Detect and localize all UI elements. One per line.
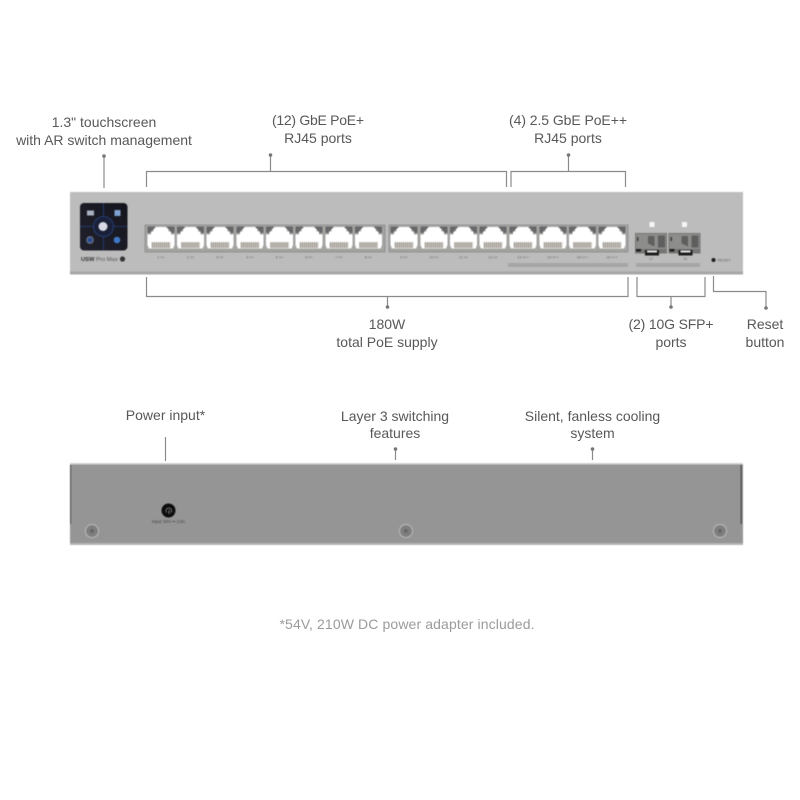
arrow: touchscreen leader (102, 154, 106, 188)
port group: ports 9-16 (389, 225, 628, 252)
reset button: RESET (718, 258, 731, 262)
port number labels: 11 ϟ+ (459, 256, 469, 260)
text: PoE supply: 180W (369, 316, 406, 332)
port number labels: 14 ϟ++ (547, 256, 560, 260)
arrow: layer 3 leader (394, 447, 397, 460)
port number labels: 13 ϟ++ (517, 256, 530, 260)
status LEDs (650, 222, 687, 227)
SFP ports (635, 233, 700, 256)
text: cooling: Silent, fanless cooling (525, 408, 660, 424)
port number labels: 17 (649, 257, 653, 261)
panel: switch rear (70, 463, 743, 545)
port number labels: 15 ϟ++ (577, 256, 589, 260)
port number labels: 10 ϟ+ (429, 256, 440, 260)
heading: touchscreen callout (15, 114, 192, 148)
heading: 2.5 GbE ports callout: (4) 2.5 GbE PoE++ (509, 112, 627, 128)
chassis (70, 192, 743, 272)
rear bottom edge (70, 543, 743, 545)
chassis lip (70, 272, 743, 274)
arrow: cooling leader (591, 447, 594, 460)
port number labels: 2 ϟ+ (187, 256, 195, 260)
port group: ports 1-8 (145, 225, 385, 252)
arrow: power leader (164, 437, 166, 461)
text: cooling: system (570, 425, 615, 441)
speed bar: SFP (636, 263, 700, 267)
port number labels (157, 256, 687, 261)
heading: GbE ports callout: RJ45 ports (284, 130, 352, 146)
heading: touchscreen callout: with AR switch management (15, 132, 192, 148)
text: PoE supply: total PoE supply (336, 334, 438, 350)
port number labels: 8 ϟ+ (365, 256, 373, 260)
bracket: SFP ports (637, 277, 705, 309)
bracket: 2.5 GbE ports (511, 153, 626, 187)
text: reset button: button (746, 334, 784, 350)
text: SFP ports: ports (655, 334, 687, 350)
port number labels: 1 ϟ+ (157, 256, 165, 260)
screws (85, 524, 727, 538)
speed bar: 2.5 GbE (508, 263, 628, 267)
label: model name: USW Pro Max (81, 257, 118, 263)
text: reset button: Reset (747, 316, 783, 332)
text: layer 3: Layer 3 switching (341, 408, 449, 424)
port number labels: 12 ϟ+ (488, 256, 499, 260)
port number labels: 3 ϟ+ (216, 256, 224, 260)
heading: 2.5 GbE ports callout: RJ45 ports (534, 130, 602, 146)
bracket: PoE supply (146, 277, 628, 309)
text: cooling (525, 408, 660, 441)
port number labels: 9 ϟ+ (400, 256, 408, 260)
icon: power socket (162, 504, 176, 518)
port number labels: 18 (683, 257, 687, 261)
label: power rating: Input: 54V ⎓ 3.9A (152, 519, 185, 524)
port number labels: 6 ϟ+ (305, 256, 313, 260)
port number labels: 5 ϟ+ (276, 256, 284, 260)
text: SFP ports (628, 316, 714, 350)
panel: switch front (70, 192, 743, 274)
port number labels: 4 ϟ+ (246, 256, 254, 260)
port number labels: 16 ϟ++ (606, 256, 619, 260)
text: layer 3: features (370, 425, 420, 441)
footnote: *54V, 210W DC power adapter included. (280, 616, 534, 632)
text: power input: Power input* (126, 407, 206, 423)
arrow: reset leader (714, 276, 768, 310)
text: layer 3 (341, 408, 449, 441)
text: SFP ports: (2) 10G SFP+ (628, 316, 714, 332)
port number labels: 7 ϟ+ (335, 256, 343, 260)
heading: GbE ports callout: (12) GbE PoE+ (272, 112, 364, 128)
reset button (712, 258, 731, 262)
rear top edge (70, 463, 743, 464)
heading: touchscreen callout: 1.3" touchscreen (52, 114, 156, 130)
bracket: GbE ports (146, 153, 506, 187)
text: reset button (746, 316, 784, 350)
heading: GbE ports callout (272, 112, 364, 146)
heading: 2.5 GbE ports callout (509, 112, 627, 146)
icon: touchscreen display (80, 203, 128, 250)
rear side edges (70, 465, 742, 524)
text: PoE supply (336, 316, 438, 350)
rear chassis (70, 464, 743, 544)
